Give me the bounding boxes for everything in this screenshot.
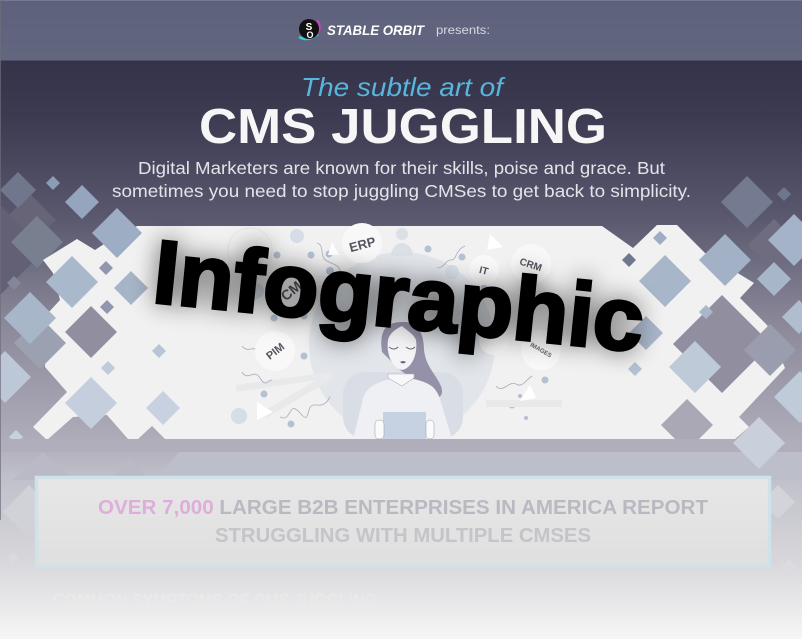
bubble: small right [479, 325, 509, 355]
face [388, 326, 416, 370]
hair [381, 322, 442, 398]
triangles [257, 234, 536, 420]
bubble: PIM [255, 331, 295, 371]
logo icon [299, 19, 320, 40]
watermark: Infographic: Infographic [149, 222, 649, 372]
title block [112, 72, 691, 201]
bubble: CMS [274, 267, 314, 307]
panel diamonds [0, 208, 796, 451]
callout: over 7,000 enterprises [36, 478, 770, 566]
intro line 2: sometimes you need to stop juggling CMSes to get back to simplicity. [112, 181, 691, 201]
squiggles [242, 243, 532, 418]
bubble: ERP: ERP [348, 234, 378, 255]
body [353, 379, 452, 439]
bubble: IT: IT [478, 265, 489, 278]
intro line 1: Digital Marketers are known for their skills, poise and grace. But [138, 158, 665, 178]
silhouette behind the figure [343, 228, 463, 439]
bubble: CMS: CMS [278, 272, 312, 304]
callout line 2: STRUGGLING WITH MULTIPLE CMSES [215, 525, 591, 547]
floating bubbles and dots [231, 229, 548, 428]
bubble: IT [469, 255, 499, 285]
presents label: presents: [436, 23, 490, 37]
logo icon: S [306, 22, 313, 33]
tablet [383, 412, 426, 439]
bubble: left top [228, 228, 272, 272]
logo icon: O [306, 30, 314, 40]
bubble: images: IMAGES [529, 342, 552, 359]
background circle [309, 252, 495, 438]
hero panel background [33, 225, 785, 440]
hands [375, 420, 384, 439]
bubble: PIM: PIM [264, 341, 287, 363]
pale rays [236, 372, 562, 418]
callout line 1: OVER 7,000 LARGE B2B ENTERPRISES IN AMERICA REPORT [98, 497, 708, 519]
faded section heading: COMMON SYMPTOMS OF CMS JUGGLING [53, 591, 377, 612]
bubble: CRM [511, 244, 551, 284]
decorative diamonds behind panel [0, 172, 802, 444]
figure: woman reading tablet [353, 322, 452, 439]
main title: CMS JUGGLING [199, 100, 607, 154]
bubble: ERP [342, 223, 382, 263]
title kicker: The subtle art of [301, 72, 506, 102]
header bar [0, 0, 802, 61]
hero illustration [228, 223, 562, 439]
brand name: STABLE ORBIT [327, 22, 425, 38]
watermark: Infographic: Infographic [149, 222, 649, 372]
bubble: CRM: CRM [518, 257, 543, 274]
bubble: images [521, 330, 561, 370]
band below hero [0, 417, 802, 574]
